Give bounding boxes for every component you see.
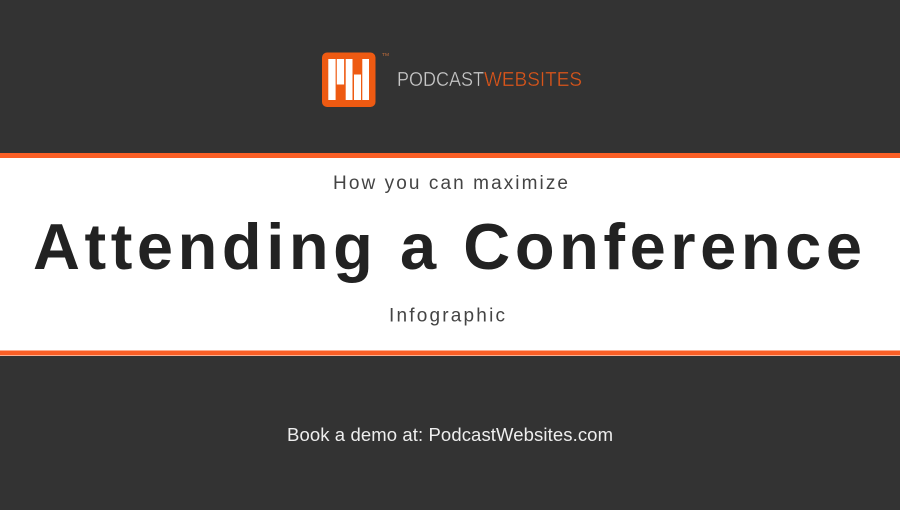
title: Attending a Conference bbox=[33, 210, 862, 283]
caption: Infographic bbox=[389, 306, 505, 326]
logo bbox=[322, 52, 582, 107]
logo wordmark accent: WEBSITES bbox=[484, 69, 582, 91]
logo wordmark: PODCAST bbox=[397, 69, 484, 91]
call to action: Book a demo at: PodcastWebsites.com bbox=[287, 424, 613, 445]
trademark mark: TM bbox=[382, 52, 389, 57]
subtitle: How you can maximize bbox=[333, 173, 568, 194]
panel: white title band bbox=[0, 153, 900, 356]
icon: orange piano-key logo bbox=[322, 52, 376, 107]
